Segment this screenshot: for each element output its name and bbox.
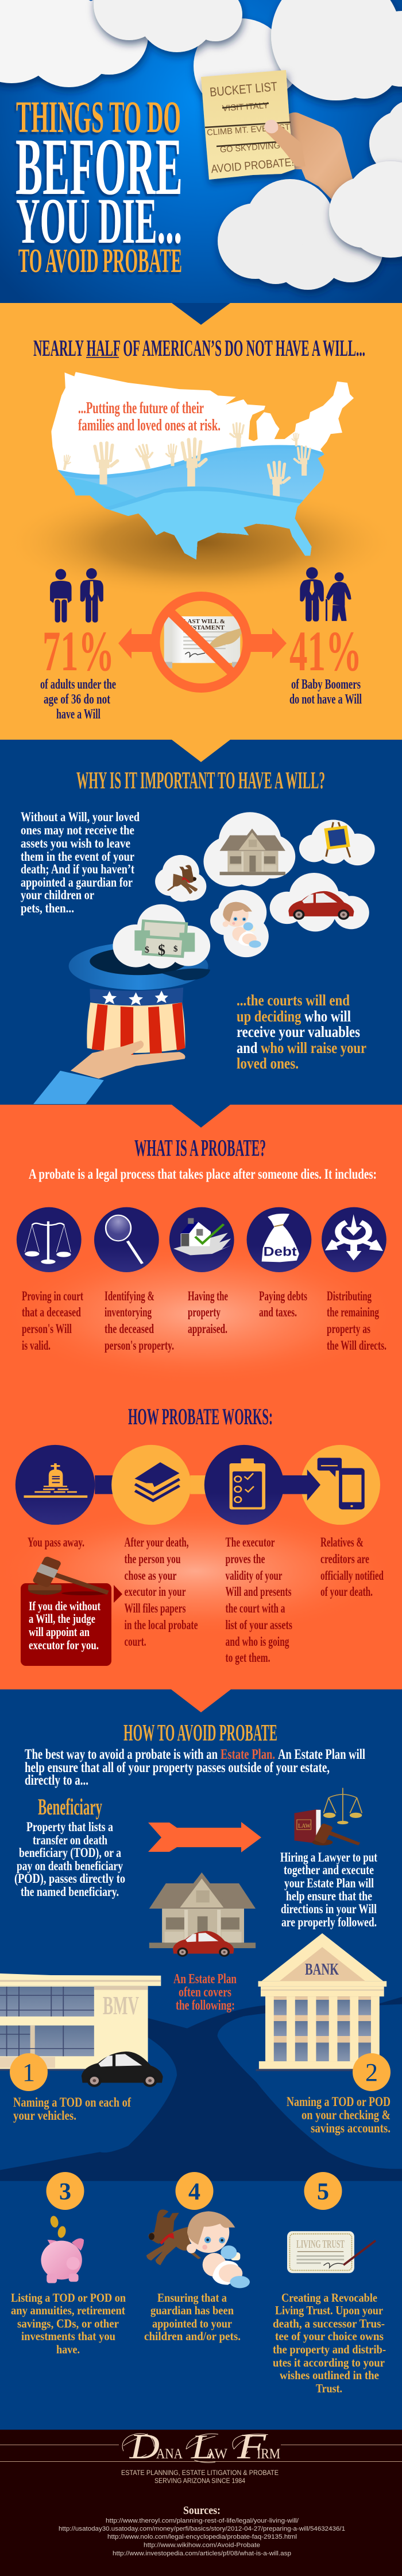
tagline <box>121 2470 279 2485</box>
stat caption right: of Baby Boomers <box>291 677 361 692</box>
text: item 2 <box>287 2095 391 2135</box>
text: item 4: children and/or pets. <box>144 2329 241 2343</box>
callout text: will appoint an <box>29 1625 90 1639</box>
step text: executor proves: The executor <box>225 1535 275 1549</box>
text: beneficiary definition: transfer on death <box>33 1833 107 1847</box>
panel: what is a probate <box>0 1105 402 1689</box>
icon: bucket list note <box>201 70 295 180</box>
panel: hero <box>0 0 402 303</box>
text: item 5: wishes outlined in the <box>280 2368 379 2382</box>
scroll <box>164 616 244 669</box>
money signs: $ <box>145 945 149 955</box>
step text: relatives notified: creditors are <box>320 1552 369 1566</box>
text: appraised: Having the <box>188 1289 228 1303</box>
icon: living trust certificate <box>287 2231 376 2273</box>
step text: executor files: After your death, <box>124 1535 188 1549</box>
stat caption left: of adults under the <box>40 677 116 692</box>
cloud: top left <box>0 0 148 87</box>
text: beneficiary definition: (POD), passes directly to <box>14 1871 125 1886</box>
title <box>16 92 183 279</box>
heading: beneficiary: Beneficiary <box>38 1794 102 1820</box>
text: hiring a lawyer: help ensure that the <box>286 1889 372 1903</box>
stat: 71 percent <box>40 619 116 722</box>
will title: LAST WILL & <box>183 618 225 625</box>
logo: Dana Law Firm <box>0 2427 402 2466</box>
text: courts decide: receive your valuables <box>237 1023 360 1040</box>
text: beneficiary definition: Property that lists a <box>26 1820 113 1834</box>
sources list: http://www.investopedia.com/articles/pf/08/what-is-a-will.asp <box>113 2550 291 2557</box>
text: identifying: the deceased <box>105 1322 154 1336</box>
note line: avoid probate: AVOID PROBATE! <box>211 156 295 176</box>
intro text: estate plan: directly to a... <box>25 1773 88 1788</box>
sources list: http://www.theroyl.com/planning-rest-of-life/legal/your-living-will/ <box>106 2517 299 2524</box>
cloud: lower right back <box>218 179 383 290</box>
arrow: third to fourth step <box>283 1470 320 1501</box>
text: courts decide: up deciding who will <box>237 1008 351 1025</box>
text: item 5: death, a successor Trus- <box>273 2317 385 2330</box>
text: identifying: person's property. <box>105 1338 174 1353</box>
icon: magnifier <box>94 1207 159 1272</box>
icon: clipboard step <box>204 1445 284 1525</box>
text: item 4: Ensuring that a <box>157 2291 227 2305</box>
text: estate plan covers: An Estate Plan <box>173 1972 237 1987</box>
panel: why have a will <box>0 740 402 1105</box>
step text: executor proves <box>225 1535 292 1665</box>
icon: crossed out last will: TESTAMENT <box>184 624 225 631</box>
text: courts decide: and who will raise your <box>237 1039 366 1056</box>
text: item 1 <box>13 2095 131 2123</box>
text: appraised <box>188 1289 228 1336</box>
icon: property appraised <box>169 1207 234 1272</box>
icon: baby cloud <box>210 890 269 957</box>
text: without a will: Without a Will, your loved <box>21 810 140 824</box>
callout text: a Will, the judge <box>29 1611 95 1626</box>
icon: distribution arrows <box>322 1207 386 1272</box>
sources list: http://www.wikihow.com/Avoid-Probate <box>144 2542 260 2549</box>
text: debts <box>259 1289 307 1319</box>
step text: executor files: in the local probate <box>124 1618 198 1632</box>
text: item 4 <box>144 2291 241 2343</box>
text: without a will: them in the event of your <box>21 849 134 864</box>
text: debts: and taxes. <box>259 1305 297 1319</box>
text: item 5: the property and distrib- <box>273 2342 386 2356</box>
step text: executor files: Will files papers <box>124 1601 186 1615</box>
number 3 <box>46 2172 84 2210</box>
money signs <box>145 942 178 958</box>
text: appraised: property <box>188 1305 221 1319</box>
icon: scales <box>17 1207 82 1272</box>
flow: probate steps <box>16 1445 380 1525</box>
tagline: ESTATE PLANNING, ESTATE LITIGATION & PROBATE <box>121 2470 279 2477</box>
road and hills <box>0 1997 402 2181</box>
stat caption left: have a Will <box>56 707 100 722</box>
arrow: right <box>248 628 287 659</box>
number 2: 2 <box>365 2058 378 2087</box>
text: without a will: death; And if you haven’t <box>21 862 134 876</box>
note line: visit italy: VISIT ITALY <box>222 100 269 114</box>
icon: uncle sam hat <box>69 942 210 1055</box>
text: identifying <box>105 1289 174 1353</box>
heading: how probate works: HOW PROBATE WORKS: <box>128 1404 273 1429</box>
text: estate plan covers: often covers <box>179 1985 231 2000</box>
text: item 3: savings, CDs, or other <box>17 2317 119 2330</box>
text: without a will: appointed a gaurdian for <box>21 875 133 889</box>
stat caption right <box>289 677 362 707</box>
sources list: http://www.nolo.com/legal-encyclopedia/probate-faq-29135.html <box>107 2534 297 2540</box>
text: without a will: ones may not receive the <box>21 823 134 837</box>
step text: executor proves: proves the <box>225 1552 265 1566</box>
number 1 <box>10 2053 48 2091</box>
text: beneficiary definition: pay on death beneficiary <box>17 1859 123 1873</box>
stat caption left: age of 36 do not <box>44 692 110 707</box>
note line: climb everest: CLIMB MT. EVEREST <box>207 122 290 138</box>
BMV sign: BMV <box>103 1991 139 2020</box>
logo: Dana Law Firm: IRM <box>257 2446 280 2462</box>
panel: footer <box>0 2427 402 2576</box>
cloud: top right <box>271 0 402 100</box>
step text: relatives notified: Relatives & <box>320 1535 364 1549</box>
text: proving <box>22 1289 83 1353</box>
text: debts: Paying debts <box>259 1289 307 1303</box>
icon: house cloud <box>203 812 295 887</box>
icon: crossed out last will <box>155 596 247 688</box>
icon: gravestone step <box>16 1445 133 1525</box>
number 5 <box>304 2172 342 2210</box>
step text: relatives notified: of your death. <box>320 1584 373 1599</box>
intro text: estate plan: The best way to avoid a probate is with an <box>25 1747 218 1762</box>
arrow: beneficiary to lawyer <box>148 1822 261 1852</box>
stat: 41 percent <box>289 619 362 707</box>
heading: what is a probate: WHAT IS A PROBATE? <box>134 1134 266 1161</box>
icon: money cloud <box>113 904 210 969</box>
icon: arm and palm <box>284 112 353 201</box>
step text: relatives notified <box>320 1535 384 1599</box>
illustration: thought clouds of assets <box>33 812 375 1104</box>
text: courts decide: loved ones. <box>237 1055 299 1072</box>
text: hiring a lawyer <box>280 1850 377 1929</box>
sources list: http://usatoday30.usatoday.com/money/perfi/basics/story/2012-04-27/preparing-a-will/54632436/1 <box>59 2526 345 2532</box>
icon: house and car <box>149 1872 256 1957</box>
intro text: estate plan: An Estate Plan will <box>278 1747 365 1762</box>
tagline: SERVING ARIZONA SINCE 1984 <box>154 2478 246 2485</box>
text: item 3: any annuities, retirement <box>11 2303 125 2317</box>
icon: black car <box>82 2052 163 2087</box>
text: item 3: have. <box>56 2342 80 2356</box>
text: item 1: Naming a TOD on each of <box>13 2095 131 2109</box>
map caption: families and loved ones at risk. <box>78 416 221 434</box>
icon: bank building <box>256 1933 386 2071</box>
number 4 <box>176 2172 214 2210</box>
icon: young adults <box>50 568 103 623</box>
map caption: ...Putting the future of their <box>78 399 204 417</box>
bank sign: BANK <box>305 1960 339 1979</box>
text: courts decide <box>237 992 366 1072</box>
icon: dog and baby <box>146 2209 250 2288</box>
icon: debt bag: Debt <box>264 1245 297 1259</box>
panel: hero: BEFORE <box>16 121 183 212</box>
text: identifying: Identifying & <box>105 1289 154 1303</box>
step text: executor proves: list of your assets <box>225 1618 292 1632</box>
text: without a will <box>21 810 140 915</box>
text: beneficiary definition <box>14 1820 125 1899</box>
icon: law book, gavel and scales <box>294 1788 362 1845</box>
text: estate plan covers: the following: <box>176 1998 235 2013</box>
logo: Dana Law Firm: D <box>129 2427 160 2466</box>
step text: executor files: the person you <box>124 1552 181 1566</box>
text: item 5: tee of your choice owns <box>275 2329 384 2343</box>
number 4: 4 <box>188 2179 200 2205</box>
text: item 5: utes it according to your <box>273 2356 385 2369</box>
icon: debt bag <box>247 1207 311 1272</box>
number 3: 3 <box>59 2179 71 2205</box>
logo: Dana Law Firm: F <box>237 2427 266 2466</box>
callout text: executor for you. <box>29 1638 99 1652</box>
map caption <box>78 399 221 434</box>
text: distributing: property as <box>327 1322 370 1336</box>
text: without a will: your children or <box>21 888 94 902</box>
cloud: lower right front <box>329 161 402 258</box>
text: proving: Proving in court <box>22 1289 83 1303</box>
law icon label: LAW <box>298 1823 311 1829</box>
text: item 3: Listing a TOD or POD on <box>11 2291 126 2305</box>
number 1: 1 <box>22 2058 35 2087</box>
text: item 3 <box>11 2291 126 2356</box>
sources heading: Sources: <box>183 2504 221 2517</box>
text: item 5: Creating a Revocable <box>281 2291 377 2305</box>
text: beneficiary definition: the named beneficiary. <box>21 1885 119 1899</box>
note line: skydiving: GO SKYDIVING <box>219 141 280 155</box>
text: item 5: Trust. <box>316 2381 342 2395</box>
step text: executor proves: Will and presents <box>225 1584 292 1599</box>
intro text: estate plan <box>25 1747 365 1788</box>
stat caption left <box>40 677 116 722</box>
step text: executor proves: to get them. <box>225 1650 270 1665</box>
icon: dog cloud <box>155 855 206 902</box>
text: item 1: your vehicles. <box>13 2108 76 2123</box>
text: distributing: Distributing <box>327 1289 372 1303</box>
text: hiring a lawyer: together and execute <box>284 1863 374 1877</box>
logo: Dana Law Firm: ANA <box>156 2446 183 2462</box>
step text: executor files: chose as your <box>124 1568 177 1583</box>
text: without a will: assets you wish to leave <box>21 836 130 850</box>
text: identifying: inventorying <box>105 1305 152 1319</box>
stat: 71 percent: 71% <box>42 619 114 683</box>
icon: gavel <box>28 1556 109 1595</box>
cloud: top centre <box>94 0 242 52</box>
step text: pass away: You pass away. <box>28 1535 84 1549</box>
step text: executor proves: validity of your <box>225 1568 283 1583</box>
text: proving: person's Will <box>22 1322 72 1336</box>
cloud: behind list <box>194 18 299 114</box>
panel: will statistics <box>0 303 402 740</box>
map: sinking United States <box>51 372 354 560</box>
text: distributing <box>327 1289 386 1353</box>
money signs: $ <box>173 945 178 954</box>
callout: no will <box>21 1556 122 1666</box>
text: proving: is valid. <box>22 1338 51 1353</box>
text: item 3: investments that you <box>21 2329 115 2343</box>
number 2 <box>353 2053 391 2091</box>
number 5: 5 <box>317 2179 329 2205</box>
callout text <box>29 1599 101 1652</box>
icons: probate steps <box>17 1207 386 1272</box>
arrow: left <box>118 628 155 659</box>
panel: hero: TO AVOID PROBATE <box>18 242 182 279</box>
icon: phone step <box>301 1445 380 1525</box>
text: without a will: pets, then... <box>21 901 74 915</box>
callout text: If you die without <box>29 1599 101 1613</box>
text: proving: that a deceased <box>22 1305 81 1319</box>
step text: executor proves: the court with a <box>225 1601 285 1615</box>
icon: baby boomers <box>300 567 351 621</box>
text: courts decide: ...the courts will end <box>237 992 350 1009</box>
text: hiring a lawyer: your Estate Plan will <box>284 1876 374 1890</box>
note line: bucket list: BUCKET LIST <box>209 79 278 99</box>
text: item 5 <box>273 2291 386 2395</box>
cloud: right edge <box>369 100 402 176</box>
money signs: $ <box>158 942 165 958</box>
icon: painting cloud <box>299 820 375 865</box>
logo: Dana Law Firm: L <box>191 2428 214 2466</box>
step text: executor files: executor in your <box>124 1584 186 1599</box>
icon: car cloud <box>270 873 369 931</box>
text: item 5: Living Trust. Upon your <box>275 2303 383 2317</box>
text: beneficiary definition: beneficiary (TOD), or a <box>19 1845 121 1860</box>
icon: thumb over note <box>264 120 306 166</box>
title line 3: YOU DIE... <box>16 185 182 257</box>
panel: how to avoid probate <box>0 1689 402 2430</box>
step text: executor files <box>124 1535 198 1649</box>
icon: BMV building <box>0 1973 161 2070</box>
sources list <box>59 2517 345 2557</box>
stat caption right: do not have a Will <box>289 692 362 707</box>
icon: piggy bank <box>41 2215 84 2283</box>
step text: executor proves: and who is going <box>225 1634 289 1649</box>
text: item 4: guardian has been <box>150 2303 234 2317</box>
title line 1: THINGS TO DO <box>16 92 181 142</box>
map shadow <box>3 485 399 600</box>
icon: hand holding hat <box>33 1040 185 1104</box>
text: estate plan covers <box>173 1972 237 2013</box>
step text: executor files: court. <box>124 1634 146 1649</box>
icon: papers step <box>111 1445 226 1525</box>
logo: Dana Law Firm: AW <box>206 2446 227 2462</box>
text: item 4: appointed to your <box>152 2317 232 2330</box>
trust title: LIVING TRUST <box>296 2238 345 2251</box>
text: appraised: appraised. <box>188 1322 227 1336</box>
stat: 41 percent: 41% <box>289 619 362 683</box>
intro text: estate plan: Estate Plan. <box>221 1747 275 1762</box>
